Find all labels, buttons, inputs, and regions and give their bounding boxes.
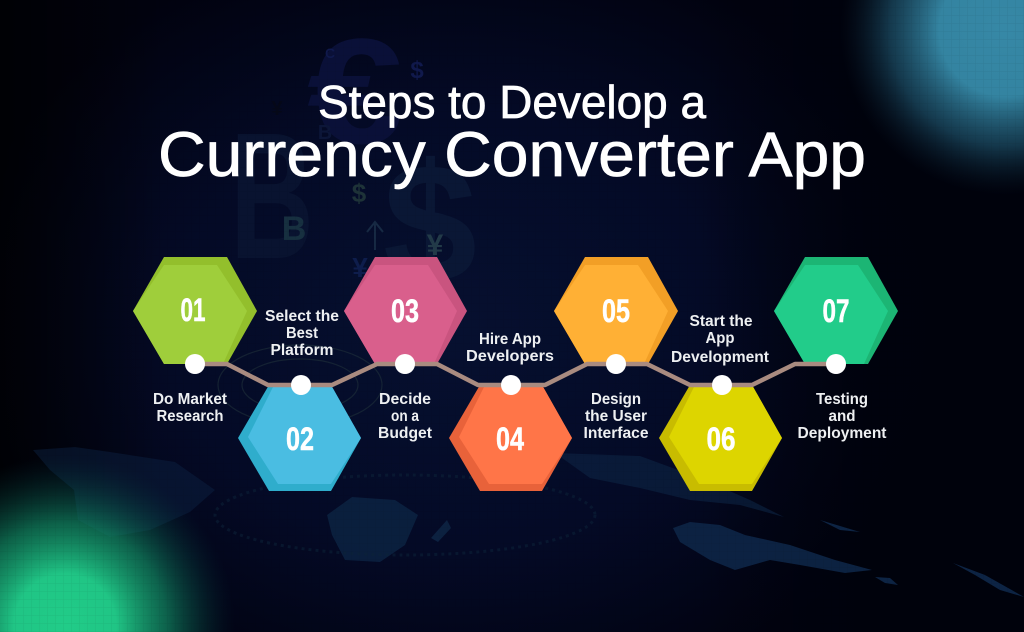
label: start the app development: App: [706, 330, 734, 347]
green glow bottom left: [0, 455, 235, 632]
label: hire app developers: Hire App: [479, 331, 541, 348]
label: do market research: Do Market: [153, 391, 227, 408]
step 05 hexagon: 05: [602, 293, 630, 329]
title: Currency Converter App: [158, 120, 866, 190]
step 02 hexagon: [238, 385, 361, 491]
label: select the best platform: Best: [286, 325, 318, 342]
title: [158, 76, 866, 190]
faint currency symbols backdrop: B: [230, 96, 314, 297]
label: testing and deployment: Testing: [816, 391, 868, 408]
step 01 hexagon: 01: [180, 292, 206, 328]
faint radar rings: [215, 345, 595, 555]
step 04 hexagon: 04: [496, 421, 524, 457]
connector line: [195, 364, 836, 385]
label: select the best platform: [265, 308, 339, 359]
step 06 hexagon: [659, 385, 782, 491]
step 07 hexagon: 07: [822, 293, 850, 329]
step 07 hexagon: [774, 257, 898, 364]
faint world map backdrop: [33, 447, 1024, 597]
label: decide on a budget: on a: [391, 408, 419, 425]
label: testing and deployment: and: [828, 408, 856, 425]
label: decide on a budget: Budget: [378, 425, 432, 442]
faint currency symbols backdrop: B: [282, 210, 306, 248]
step 01 hexagon: [133, 257, 257, 364]
label: design the user interface: Design: [591, 391, 641, 408]
label: design the user interface: the User: [585, 408, 647, 425]
label: select the best platform: Platform: [270, 342, 334, 359]
label: decide on a budget: [378, 391, 432, 442]
faint currency symbols backdrop: $: [410, 57, 424, 84]
faint currency symbols backdrop: ¥: [271, 98, 283, 120]
step 04 hexagon: [449, 385, 572, 491]
label: hire app developers: Developers: [466, 348, 554, 365]
label: select the best platform: Select the: [265, 308, 339, 325]
label: testing and deployment: Deployment: [798, 425, 886, 442]
teal glow top right: [840, 0, 1024, 195]
label: do market research: [153, 391, 227, 425]
step 03 hexagon: [344, 257, 467, 364]
faint currency symbols backdrop: C: [325, 45, 335, 61]
faint currency symbols backdrop: $: [352, 178, 367, 208]
step 05 hexagon: [554, 257, 678, 364]
label: hire app developers: [466, 331, 554, 365]
title: Steps to Develop a: [318, 76, 706, 128]
label: start the app development: [671, 313, 769, 366]
faint currency symbols backdrop: [230, 7, 477, 319]
step 02 hexagon: 02: [286, 421, 314, 457]
faint currency symbols backdrop: €: [307, 7, 403, 175]
label: design the user interface: [584, 391, 649, 442]
connector dots: [185, 354, 846, 395]
label: design the user interface: Interface: [584, 425, 649, 442]
step 03 hexagon: 03: [391, 293, 419, 329]
label: do market research: Research: [156, 408, 224, 425]
label: start the app development: Development: [671, 349, 769, 366]
label: start the app development: Start the: [690, 313, 753, 330]
faint currency symbols backdrop: $: [383, 129, 477, 319]
faint currency symbols backdrop: ¥: [352, 252, 368, 283]
step 06 hexagon: 06: [706, 421, 736, 457]
faint currency symbols backdrop: B: [318, 122, 332, 144]
faint currency symbols backdrop: ¥: [427, 229, 444, 262]
label: testing and deployment: [798, 391, 886, 442]
label: decide on a budget: Decide: [379, 391, 431, 408]
